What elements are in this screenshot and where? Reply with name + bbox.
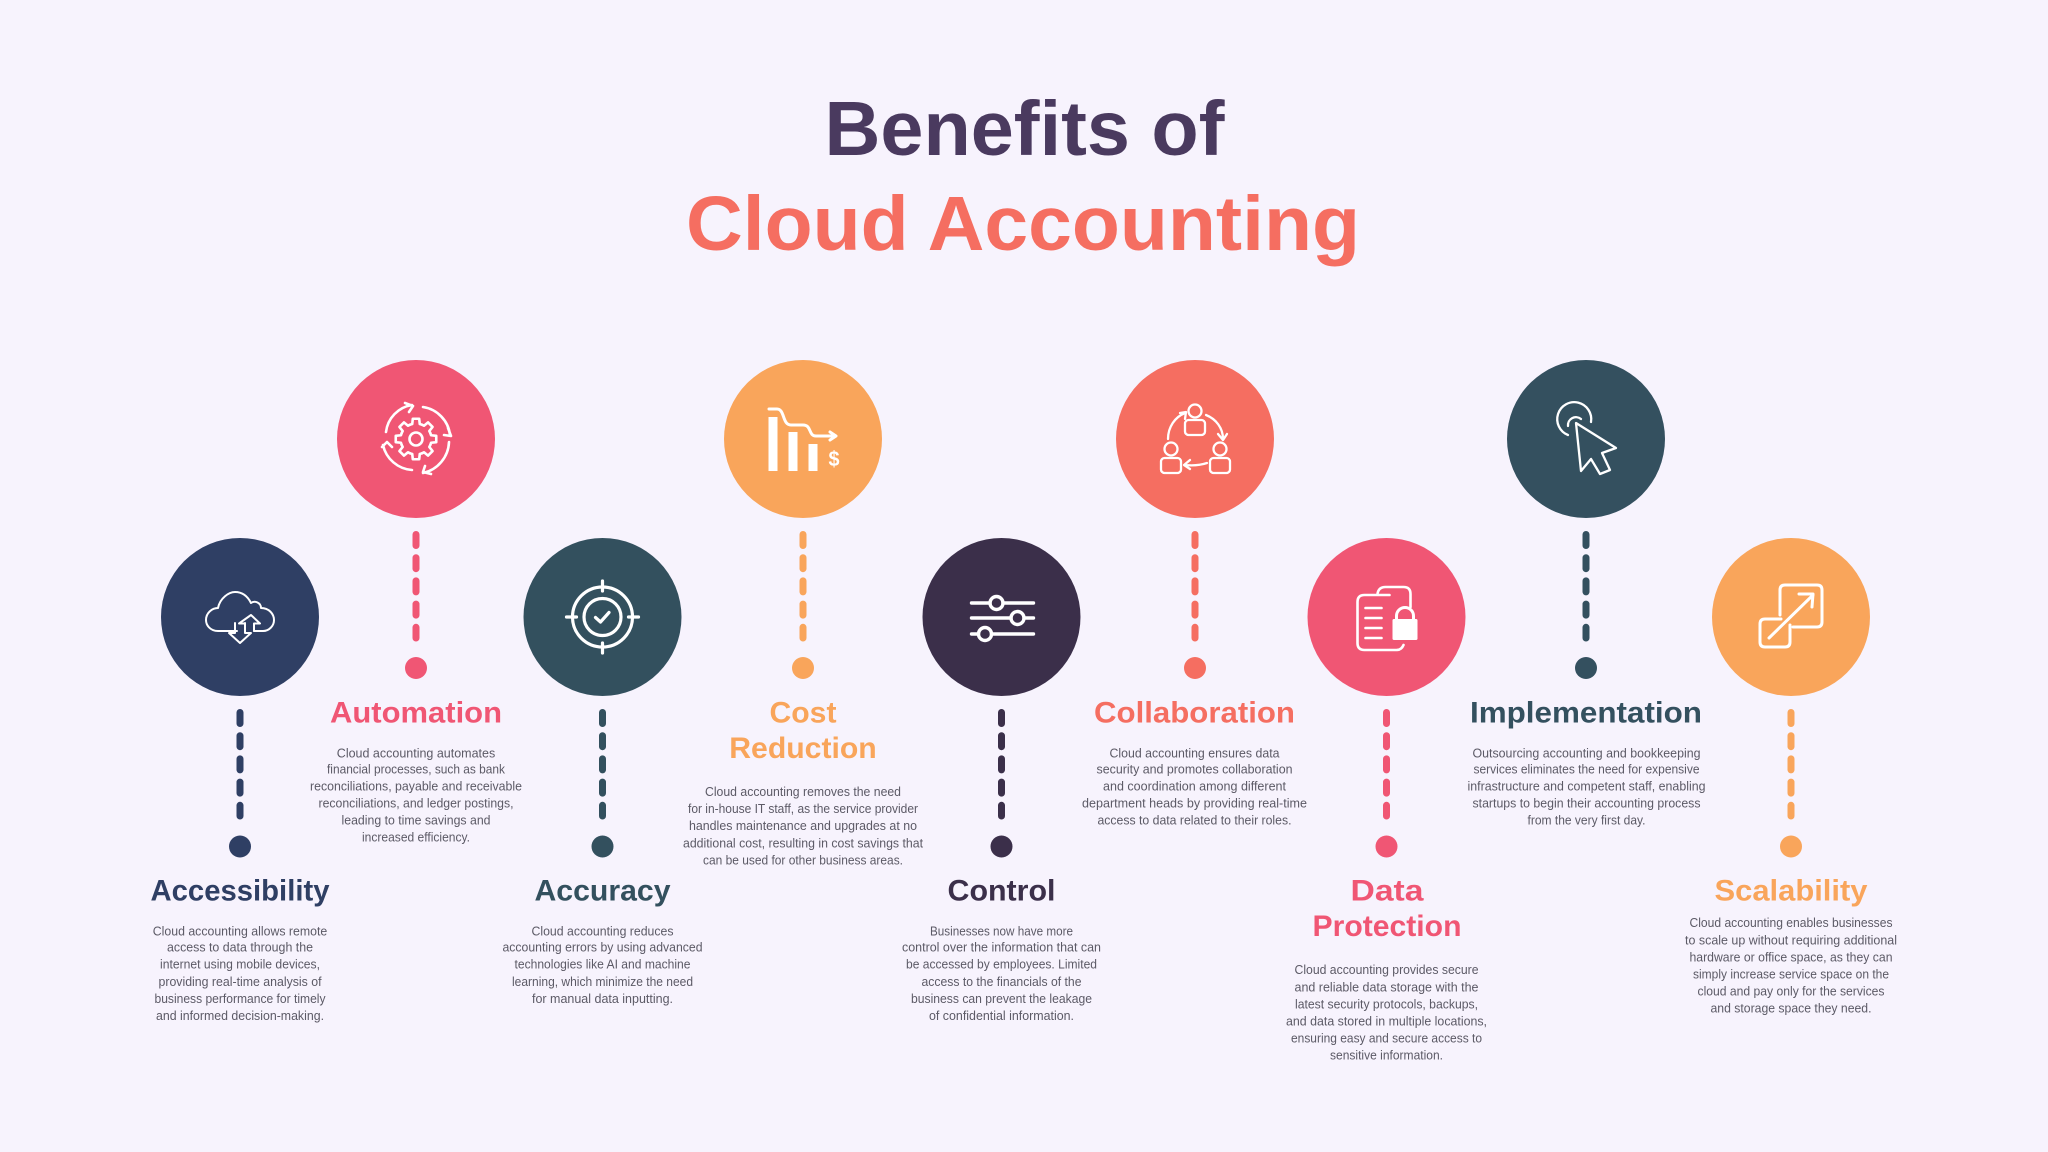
text: data protection: ensuring easy and secure access to: [1291, 1032, 1482, 1046]
text: collaboration: [1082, 747, 1307, 828]
text: control: Businesses now have more: [930, 925, 1073, 939]
heading: data protection: [1312, 875, 1462, 943]
title: [686, 86, 1360, 267]
text: scalability: Cloud accounting enables businesses: [1690, 916, 1892, 930]
text: accuracy: technologies like AI and machine: [514, 958, 691, 972]
text: implementation: startups to begin their accounting process: [1472, 797, 1700, 811]
panel: data protection: [1286, 538, 1487, 1063]
icon: gear with rotating arrows: [382, 403, 451, 474]
text: scalability: simply increase service space on the: [1693, 968, 1889, 982]
dot: control: [990, 836, 1012, 858]
text: implementation: infrastructure and competent staff, enabling: [1468, 780, 1706, 794]
text: implementation: from the very first day.: [1528, 814, 1646, 828]
text: cost reduction: for in-house IT staff, as the service provider: [688, 802, 918, 816]
text: scalability: cloud and pay only for the services: [1698, 985, 1884, 999]
text: data protection: [1286, 963, 1487, 1063]
text: control: of confidential information.: [929, 1009, 1074, 1023]
icon: cursor click: [1557, 402, 1616, 474]
text: cost reduction: can be used for other business areas.: [703, 853, 903, 867]
connector: scalability: [1788, 712, 1794, 816]
text: implementation: [1468, 747, 1706, 828]
text: scalability: and storage space they need.: [1710, 1002, 1872, 1016]
text: control: control over the information that can: [902, 941, 1101, 955]
connector: collaboration: [1192, 534, 1198, 638]
text: implementation: services eliminates the need for expensive: [1474, 763, 1700, 777]
text: collaboration: department heads by providing real-time: [1082, 797, 1307, 811]
text: accuracy: accounting errors by using advanced: [502, 941, 703, 955]
connector: automation: [412, 534, 420, 638]
circle: data protection: [1308, 538, 1466, 696]
heading: accuracy: Accuracy: [534, 875, 671, 908]
icon: scale up squares: [1760, 585, 1822, 647]
connector: data protection: [1383, 712, 1390, 816]
heading: automation: Automation: [330, 697, 502, 730]
heading: scalability: Scalability: [1714, 875, 1868, 908]
text: automation: Cloud accounting automates: [337, 747, 495, 761]
connector: accuracy: [599, 712, 606, 816]
connector: control: [998, 712, 1005, 816]
text: accessibility: Cloud accounting allows remote: [153, 925, 327, 939]
heading: data protection: Protection: [1312, 910, 1462, 943]
panel: collaboration: [1082, 360, 1307, 828]
circle: scalability: [1712, 538, 1870, 696]
text: scalability: hardware or office space, as they can: [1690, 950, 1893, 964]
text: accuracy: [502, 925, 703, 1006]
icon: target with check: [566, 581, 638, 653]
text: control: [902, 925, 1101, 1023]
connector: accessibility: [236, 712, 244, 816]
panel: implementation: [1468, 360, 1706, 828]
text: implementation: Outsourcing accounting and bookkeeping: [1472, 747, 1701, 761]
circle: automation: [337, 360, 495, 518]
text: collaboration: access to data related to their roles.: [1098, 814, 1292, 828]
dot: accuracy: [592, 836, 614, 858]
text: collaboration: and coordination among different: [1103, 780, 1287, 794]
icon: cloud with up and down arrows: [206, 592, 274, 643]
heading: cost reduction: Reduction: [729, 732, 877, 765]
dot: cost reduction: [792, 657, 814, 679]
text: automation: reconciliations, payable and receivable: [310, 780, 522, 794]
dot: automation: [405, 657, 427, 679]
text: cost reduction: handles maintenance and upgrades at no: [689, 819, 917, 833]
dot: scalability: [1780, 836, 1802, 858]
title: Benefits of: [824, 86, 1225, 172]
panel: accessibility: [150, 538, 330, 1023]
dot: accessibility: [229, 836, 251, 858]
text: scalability: [1685, 916, 1897, 1016]
text: automation: leading to time savings and: [342, 814, 491, 828]
circle: collaboration: [1116, 360, 1274, 518]
text: collaboration: security and promotes collaboration: [1096, 763, 1293, 777]
text: accessibility: and informed decision-making.: [156, 1009, 324, 1023]
text: accessibility: internet using mobile devices,: [160, 958, 320, 972]
panel: accuracy: [502, 538, 703, 1006]
text: data protection: and reliable data storage with the: [1294, 980, 1479, 994]
heading: control: Control: [948, 875, 1056, 908]
text: automation: financial processes, such as bank: [327, 763, 506, 777]
panel: scalability: [1685, 538, 1897, 1016]
icon: three people cycle: [1161, 404, 1230, 473]
title: Cloud Accounting: [686, 181, 1360, 267]
connector: implementation: [1582, 534, 1590, 638]
heading: implementation: Implementation: [1470, 697, 1702, 730]
heading: data protection: Data: [1350, 875, 1424, 908]
circle: accuracy: [524, 538, 682, 696]
heading: cost reduction: [729, 697, 877, 765]
icon: falling bars with dollar: [768, 409, 840, 471]
icon: falling bars with dollar: $: [828, 448, 840, 471]
text: data protection: sensitive information.: [1330, 1049, 1443, 1063]
text: cost reduction: [683, 785, 924, 867]
text: collaboration: Cloud accounting ensures data: [1110, 747, 1280, 761]
panel: cost reduction: [683, 360, 924, 867]
text: accessibility: [153, 925, 327, 1023]
text: control: access to the financials of the: [922, 975, 1082, 989]
panel: control: [902, 538, 1101, 1023]
text: automation: [310, 747, 522, 845]
circle: control: [922, 538, 1080, 696]
heading: cost reduction: Cost: [770, 697, 837, 730]
dot: collaboration: [1184, 657, 1206, 679]
text: accessibility: access to data through the: [167, 941, 313, 955]
text: accuracy: for manual data inputting.: [532, 992, 673, 1006]
panel: automation: [310, 360, 522, 845]
circle: implementation: [1507, 360, 1665, 518]
text: data protection: latest security protocols, backups,: [1295, 997, 1478, 1011]
text: data protection: and data stored in multiple locations,: [1286, 1014, 1487, 1028]
heading: collaboration: Collaboration: [1094, 697, 1295, 730]
text: automation: reconciliations, and ledger postings,: [318, 797, 514, 811]
circle: accessibility: [161, 538, 319, 696]
dot: data protection: [1376, 836, 1398, 858]
text: cost reduction: additional cost, resulting in cost savings that: [683, 836, 924, 850]
text: accuracy: learning, which minimize the need: [512, 975, 693, 989]
heading: accessibility: Accessibility: [150, 875, 330, 908]
icon: sliders: [972, 596, 1034, 640]
text: cost reduction: Cloud accounting removes the need: [705, 785, 901, 799]
icon: documents with padlock: [1358, 587, 1418, 650]
text: data protection: Cloud accounting provides secure: [1294, 963, 1479, 977]
text: accuracy: Cloud accounting reduces: [532, 925, 674, 939]
circle: cost reduction: [724, 360, 882, 518]
text: control: be accessed by employees. Limited: [906, 958, 1097, 972]
text: control: business can prevent the leakage: [911, 992, 1092, 1006]
text: accessibility: business performance for timely: [154, 992, 326, 1006]
dot: implementation: [1575, 657, 1597, 679]
text: automation: increased efficiency.: [362, 831, 470, 845]
text: scalability: to scale up without requiring additional: [1685, 933, 1897, 947]
text: accessibility: providing real-time analysis of: [158, 975, 322, 989]
connector: cost reduction: [800, 534, 806, 638]
